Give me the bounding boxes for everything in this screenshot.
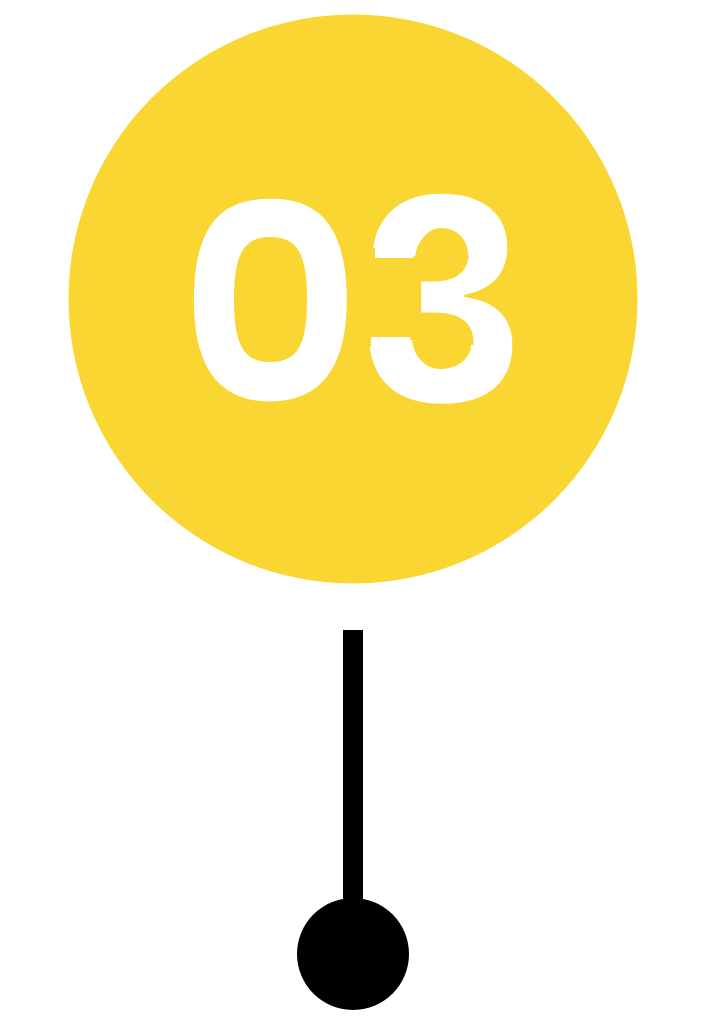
- number 03: [180, 131, 524, 465]
- number 03: 3: [362, 131, 524, 465]
- black end dot: [297, 898, 409, 1010]
- yellow number badge: [68, 14, 638, 584]
- timeline connector stem: [343, 630, 363, 910]
- number 03: 0: [180, 139, 361, 462]
